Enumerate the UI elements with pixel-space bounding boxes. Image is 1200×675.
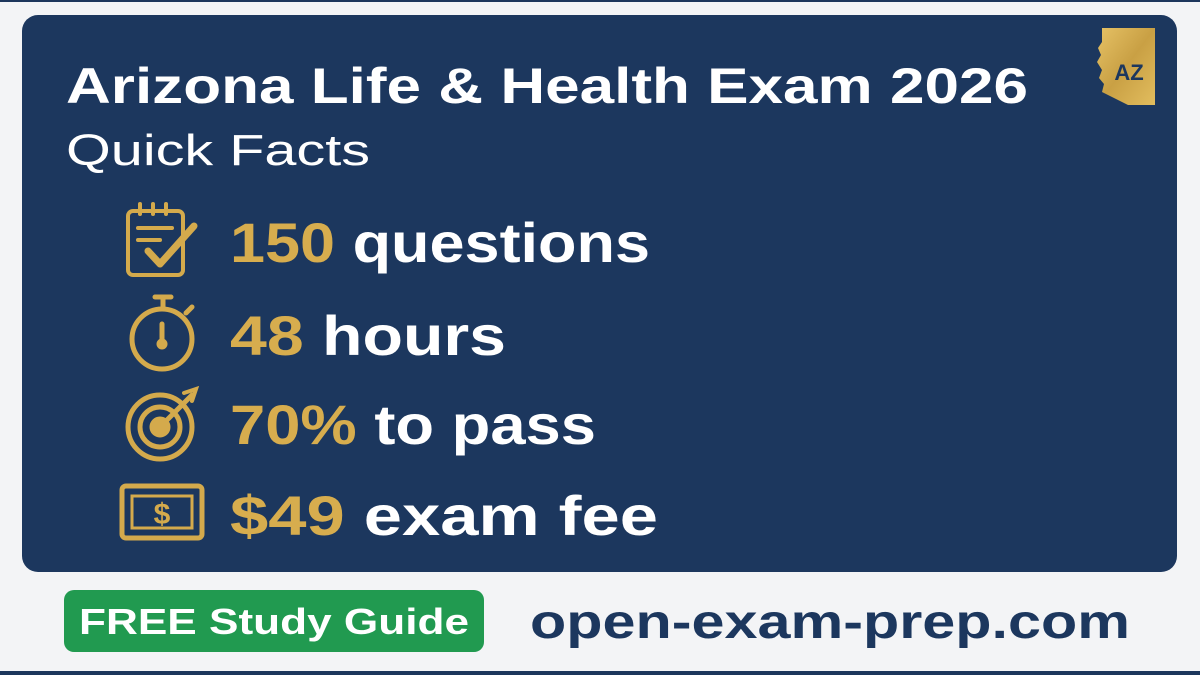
panel: main facts [22, 15, 1177, 572]
icon: AZ state: AZ [1114, 60, 1144, 85]
button: free study guide [64, 590, 484, 652]
icon: checklist [128, 204, 194, 275]
row: pass: 70% to pass [230, 393, 596, 456]
icon: money: $ [154, 498, 171, 531]
button: free study guide: FREE Study Guide [79, 601, 469, 642]
icon: money [122, 486, 202, 538]
subtitle: Quick Facts [66, 126, 370, 175]
title: Arizona Life & Health Exam 2026 [66, 58, 1028, 114]
icon: target [128, 389, 196, 459]
row: hours: 48 hours [230, 304, 506, 367]
icon: AZ state [1097, 28, 1155, 105]
row: questions: 150 questions [230, 211, 650, 274]
icon: stopwatch [132, 297, 192, 369]
row: fee: $49 exam fee [230, 484, 658, 547]
website url: open-exam-prep.com [530, 596, 1130, 649]
